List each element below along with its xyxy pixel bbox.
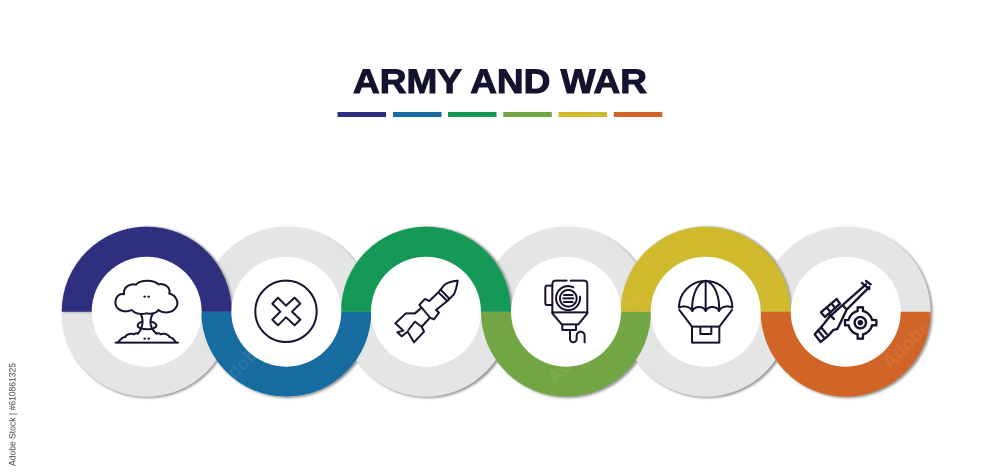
icon: sniper rifle and crosshair target — [815, 281, 876, 342]
arc: blue bottom — [201, 312, 371, 397]
arc: purple top — [62, 227, 232, 312]
watermark text: Adobe Stock — [341, 301, 438, 399]
arc: yellow top — [621, 227, 791, 312]
arc: green top — [341, 227, 511, 312]
gray ring shadows — [63, 228, 932, 398]
watermark text: Adobe Stock — [879, 276, 976, 374]
icon: military radio handset — [545, 281, 587, 342]
arc: olive green bottom — [481, 312, 651, 397]
stock id caption: Adobe Stock | #610861325 — [8, 363, 18, 466]
watermark text: Adobe Stock — [214, 296, 311, 394]
watermark text: Adobe Stock — [544, 291, 641, 389]
inner white circles — [92, 257, 901, 367]
legend color bars — [338, 112, 662, 117]
icon: missile — [395, 281, 458, 342]
icon: parachute with crate — [679, 281, 732, 343]
watermark text — [53, 276, 976, 399]
arc: orange bottom — [761, 312, 931, 397]
title: ARMY AND WAR — [353, 63, 647, 101]
watermark text: Adobe Stock — [53, 278, 150, 376]
icon: cross in circle — [255, 281, 317, 342]
watermark text: Adobe Stock — [669, 301, 766, 399]
top arc shadows — [63, 227, 792, 312]
icon: mushroom cloud — [115, 281, 178, 343]
gray rings — [62, 227, 931, 397]
